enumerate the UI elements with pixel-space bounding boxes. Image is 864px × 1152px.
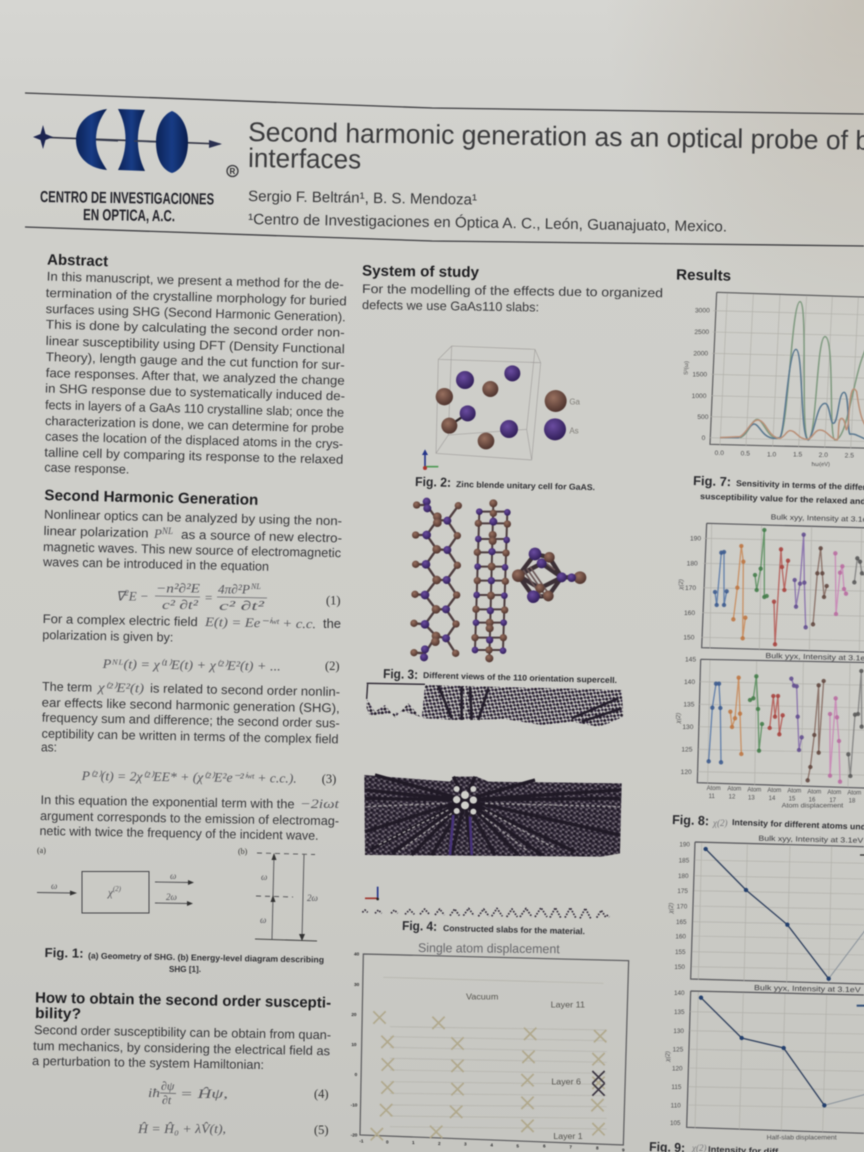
tick labels: 3 [464,1142,467,1147]
bottom chart tick labels: 115 [671,1084,682,1091]
layer lines [383,977,607,1129]
bottom chart tick labels: 125 [681,747,693,754]
text: exponential term: argument corresponds to the emission of electromag- [40,809,339,828]
top chart tick labels: χ(2) [669,903,675,915]
heading: second order susceptibility: bility? [35,1005,81,1023]
atom axis labels: Atom [707,786,721,792]
header rule bottom [25,227,864,246]
bottom chart tick labels: 125 [673,1047,684,1054]
bottom chart tick labels [665,990,685,1127]
atom axis labels: 17 [829,798,837,804]
figure 1 caption: SHG [1]. [169,964,201,974]
figure 8 caption [672,812,864,832]
figure 7 caption [693,473,864,506]
tick labels: 2000 [693,350,708,357]
authors: ¹Centro de Investigaciones en Óptica A. C., León, Guanajuato, Mexico. [248,211,727,236]
atom axis labels [707,786,861,809]
abstract text: termination of the crystalline morphology for buried [46,286,347,308]
figure 3 caption: Different views of the 110 orientation supercell. [423,670,617,685]
system of study text: defects we use GaAs110 slabs: [362,298,539,314]
system of study text: For the modelling of the effects due to organized [362,282,663,300]
equation 1: = [205,590,212,605]
susceptibility text: tum mechanics, by considering the electrical field as [33,1039,330,1058]
bottom chart tick labels: 140 [674,990,685,997]
tick labels: 20 [351,1012,357,1017]
system of study text [362,282,663,314]
text: second order term: is related to second order nonlin- [150,682,340,699]
tick labels: S²(ω) [684,361,690,375]
top chart line [706,849,864,979]
figure 2 caption: Fig. 2: [415,474,451,490]
bottom chart tick labels: 110 [671,1102,681,1109]
figure 4 caption: Fig. 4: [402,918,437,934]
text: complex electric field: For a complex electric field [43,612,198,629]
SHG introduction text: P [154,526,162,541]
SHG introduction text: linear polarization [43,524,149,540]
tick labels: -20 [351,1133,358,1138]
bottom chart tick labels: 105 [670,1120,681,1127]
heading: second order susceptibility: How to obtain the second order suscepti- [35,990,331,1012]
abstract text: cases the location of the displaced atoms in the crys- [45,430,343,451]
authors: Sergio F. Beltrán¹, B. S. Mendoza¹ [248,188,477,209]
text: second order term [41,679,340,755]
top chart tick labels: 185 [679,857,690,864]
equation 2: (2) [325,659,340,673]
figure 4: constructed slabs [362,683,623,918]
equation 4: (4) [314,1087,329,1101]
top chart tick labels [678,536,701,642]
atom axis labels: 11 [709,794,716,800]
tick labels: 2.5 [845,453,854,460]
atom axis labels: 18 [849,799,856,805]
text: second order term: as: [41,741,57,755]
front view column [471,499,511,662]
tick labels: 1500 [692,372,707,379]
tick labels: 6 [543,1144,546,1149]
heading: Second Harmonic Generation: Second Harmonic Generation [44,487,259,509]
end-on view [512,548,586,603]
header rule top [25,93,864,114]
figure 1 caption: (a) Geometry of SHG. (b) Energy-level diagram describing [88,951,324,965]
SHG introduction text: magnetic waves. This new source of electromagnetic [43,540,341,560]
text: exponential term [39,793,339,843]
frame [710,292,864,448]
figure 1a: SHG geometry: ω [170,871,176,881]
atom axis labels: Atom [847,791,861,797]
top chart tick labels: 180 [678,873,689,880]
figure 1b: energy levels [238,847,318,941]
text: second order term: frequency sum and difference; the second order sus- [42,711,340,730]
tick labels: 10 [351,1042,357,1047]
tick labels: 0.5 [741,451,750,458]
text: complex electric field: E(t) = Ee⁻ⁱʷᵗ + c.c. [204,614,316,631]
top chart tick labels: 170 [677,903,688,910]
figure 2 caption: Zinc blende unitary cell for GaAS. [456,479,595,492]
tick labels [684,308,854,468]
top chart frame and grid [691,842,864,984]
atoms [436,365,520,449]
top chart tick labels: 160 [675,933,686,940]
tick labels: 1.0 [767,451,777,458]
figure 4 caption: Constructed slabs for the material. [443,923,585,936]
atom axis labels: Atom [827,790,841,796]
susceptibility text: Second order susceptibility can be obtain from quan- [34,1023,331,1042]
figure 8 charts: atom intensity [676,512,864,809]
tick labels: 0 [702,435,706,442]
tick labels: 3000 [695,308,710,315]
heading: second order susceptibility [35,990,331,1023]
legend: Ga [569,397,581,406]
abstract text: Theory), length gauge and the cut function for sur- [46,350,345,372]
tick labels: 1.5 [793,452,803,459]
figure 2 caption [415,474,595,492]
legend [544,390,581,440]
tick labels: 2 [438,1141,441,1146]
SHG introduction text: waves can be introduced in the equation [42,555,269,574]
figure 4 caption [402,918,585,936]
heading: Results: Results [676,267,731,285]
text: second order term: ear effects like second harmonic generation (SHG), [42,696,340,715]
equation 1: 2 [125,589,129,598]
abstract text: In this manuscript, we present a method for the de- [47,270,344,292]
figure 1 caption: Fig. 1: [44,945,84,961]
abstract text: This is done by calculating the second order non- [46,318,345,340]
bottom chart tick labels: χ(2) [665,1051,672,1063]
legend: As [569,427,579,436]
plot frame [360,954,629,1145]
equation 3: (3) [322,772,336,786]
top chart tick labels: χ(2) [678,579,685,591]
atom axis labels: 15 [789,797,796,803]
atom axis labels: 14 [769,796,776,802]
atom axis labels: 12 [729,795,736,801]
figure 1a: SHG geometry: 2ω [166,892,177,902]
figure 7 caption: Fig. 7: [693,473,731,489]
tick labels: 0 [386,1140,389,1145]
institution name [40,189,214,225]
bottom chart tick labels: 135 [683,702,695,709]
atom axis labels: 16 [809,797,816,803]
tick labels: 0 [355,1072,358,1077]
equation 1: −n²∂²E [156,580,200,596]
layer labels: Layer 1 [553,1131,583,1141]
figure 7 chart: spectra [684,292,864,468]
top chart tick labels: 150 [674,964,685,971]
top chart tick labels: 175 [677,888,688,895]
abstract text: characterization is done, we can determine for probe [45,414,344,436]
atom axis labels: Atom [747,787,761,793]
bottom chart tick labels: 130 [673,1028,684,1035]
top slab [367,683,623,727]
top chart tick labels: 190 [690,536,701,543]
chart: single atom displacement [351,941,629,1152]
equation 4: iħ [148,1085,160,1100]
bottom chart series [709,671,862,782]
equation 4: ∂t [162,1093,172,1107]
heading: System of study: System of study [362,263,480,281]
text: exponential term: −2iωt [300,796,339,811]
top chart tick labels: 165 [676,919,687,926]
bottom chart tick labels: 145 [685,657,696,664]
curves [720,302,864,442]
abstract text: fects in layers of a GaAs 110 crystalline slab; once the [45,398,344,420]
institution name: EN OPTICA, A.C. [83,207,175,225]
tick labels: 7 [569,1145,572,1150]
bottom chart tick labels: 130 [682,724,694,731]
x axis label: Half-slab displacement [767,1135,837,1141]
tick labels: 1000 [692,393,707,400]
SHG introduction text [42,508,342,574]
tick labels: 500 [697,414,709,421]
equation 5 [137,1121,329,1137]
text: complex electric field: the [323,617,341,631]
tick labels: 30 [354,982,360,987]
figure 1b: energy levels: ω [261,872,267,882]
text: exponential term: netic with twice the frequency of the incident wave. [39,824,319,843]
abstract text: case response. [44,461,130,477]
top chart tick labels: 160 [684,610,695,617]
figure 9 caption [649,1139,778,1152]
abstract text: in SHG response due to systematically induced de- [45,382,345,403]
bottom chart title: Bulk yyx, Intensity at 3.1e [765,651,864,663]
top chart title: Bulk xyy, Intensity at 3.1e [771,512,864,524]
displaced atom markers [371,1011,606,1140]
atom axis labels: 13 [748,795,755,801]
atom axis labels: Atom [807,789,821,795]
top chart frame and grid [702,523,864,652]
susceptibility text: a perturbation to the system Hamiltonian: [32,1054,264,1072]
figure 1b: energy levels: ω [260,915,266,925]
tick labels: 8 [596,1146,599,1151]
equation 4: ∂ψ [161,1079,175,1093]
title: Second harmonic generation as an optical probe of b [248,117,864,156]
text: complex electric field [42,612,341,645]
chart title: Single atom displacement [418,941,560,956]
atom axis labels: Atom [727,787,741,793]
axes [422,449,438,470]
SHG introduction text: NL [161,526,173,536]
text: second order term: ceptibility can be written in terms of the complex field [41,727,339,746]
figure 1a: SHG geometry [37,846,194,913]
equation 1: NL [250,582,261,591]
SHG introduction text: Nonlinear optics can be analyzed by using the non- [44,508,342,528]
figure 8 caption: χ(2) [712,818,727,828]
equation 1: E − [128,589,149,604]
wireframe cell [436,346,541,460]
tick labels: -10 [351,1103,358,1108]
equation 1: 4π∂²P [218,582,250,596]
bottom chart title: Bulk yyx, Intensity at 3.1eV [754,983,861,994]
institution name: CENTRO DE INVESTIGACIONES [40,189,214,208]
thin slab [362,908,609,918]
bottom chart tick labels: χ(2) [676,713,682,725]
equation 1: ∇ [116,589,125,604]
figure 1a: SHG geometry: (2) [113,885,122,893]
figure 1a: SHG geometry: ω [51,881,57,891]
logo: CIO: R [230,167,236,176]
atom axis labels: Atom displacement [782,803,844,809]
middle slab [364,775,622,857]
abstract text: surfaces using SHG (Second Harmonic Generation). [46,302,346,324]
equation 4 [148,1079,329,1107]
top chart title: Bulk xyy, Intensity at 3.1eV [758,834,864,845]
figure 1a: SHG geometry: (a) [37,846,46,855]
tick labels: 2.0 [819,452,828,459]
bottom chart frame and grid [687,991,864,1133]
abstract text [44,270,347,477]
figure 1b: energy levels: (b) [238,847,248,856]
figure 8 caption: Fig. 8: [672,812,709,828]
abstract text: linear susceptibility using DFT (Density Functional [46,334,345,356]
bottom chart tick labels [676,657,696,776]
bottom chart tick labels: 120 [681,769,692,776]
abstract text: face responses. After that, we analyzed the change [46,366,345,388]
bottom chart line [701,998,864,1105]
equation 1 [116,580,341,613]
susceptibility text [32,1023,331,1072]
atom axis labels: Atom [787,789,801,795]
top chart series [715,530,864,644]
logo: CIO [33,109,238,176]
layer labels [466,991,585,1141]
tick labels [351,951,625,1152]
figure 3: supercell views [410,498,586,662]
side view chain [410,498,462,661]
figure 2: zinc blende unit cell [422,346,581,470]
tick labels: 2500 [694,329,709,336]
tick labels: 40 [354,951,360,956]
atom axis labels: Atom [767,788,781,794]
layer labels: Layer 11 [551,1000,585,1010]
top chart tick labels: 155 [675,949,686,956]
equation 2 [102,656,340,673]
figure 7 caption: Sensitivity in terms of the differ [736,478,864,492]
bottom chart tick labels: 120 [672,1065,683,1072]
equation 1: c² ∂t² [219,598,266,613]
top chart tick labels: 170 [685,585,696,592]
authors [248,188,727,236]
tick labels: 1 [412,1140,415,1145]
tick labels: -1 [359,1139,364,1144]
figure 1 caption [44,945,324,974]
figure 9 charts: half-slab displacement [665,834,864,1141]
tick labels: ħω(eV) [812,462,830,468]
heading: Abstract: Abstract [47,252,108,270]
equation 3: P⁽²⁾(t) = 2χ⁽²⁾EE* + (χ⁽²⁾E²e⁻²ⁱʷᵗ + c.c.). [81,768,297,786]
text: second order term: χ⁽²⁾E²(t) [96,679,144,695]
tick labels: 0.0 [715,450,724,457]
abstract text: talline cell by comparing its response to the relaxed [44,446,343,467]
bottom chart frame and grid [697,659,864,788]
top chart tick labels: 190 [679,842,690,849]
bottom chart tick labels: 135 [674,1009,685,1016]
top chart tick labels: 150 [683,635,695,642]
bond [449,413,468,426]
layer labels: Vacuum [466,991,498,1001]
bottom chart tick labels: 140 [684,679,695,686]
text: exponential term: In this equation the exponential term with the [40,793,295,811]
figure 3 caption [383,666,617,685]
top chart tick labels: 180 [687,561,698,568]
grid [710,293,864,449]
layer labels: Layer 6 [551,1076,581,1086]
tick labels: 4 [490,1142,493,1147]
title: interfaces [248,143,361,175]
tick labels: 5 [516,1143,519,1148]
equation 4: = Ĥψ, [180,1086,228,1101]
axis triad [365,887,379,900]
equation 5: (5) [314,1123,329,1137]
figure 3 caption: Fig. 3: [383,666,418,682]
top chart tick labels [669,842,690,971]
equation 1: (1) [326,594,341,608]
title [248,117,864,175]
text: complex electric field: polarization is given by: [42,628,173,645]
figure 8 caption: Intensity for different atoms und [732,817,864,832]
text: second order term: The term [42,680,92,695]
figure 1b: energy levels: 2ω [307,893,318,903]
equation 1: c² ∂t² [162,597,199,612]
figure 7 caption: susceptibility value for the relaxed and [700,491,864,506]
equation 5: Ĥ = Ĥ₀ + λV̂(t), [137,1121,226,1136]
figure 1a: SHG geometry: χ [108,887,113,899]
SHG introduction text: as a source of new electro- [181,528,342,545]
equation 2: Pᴺᴸ(t) = χ⁽¹⁾E(t) + χ⁽²⁾E²(t) + ... [102,656,281,673]
